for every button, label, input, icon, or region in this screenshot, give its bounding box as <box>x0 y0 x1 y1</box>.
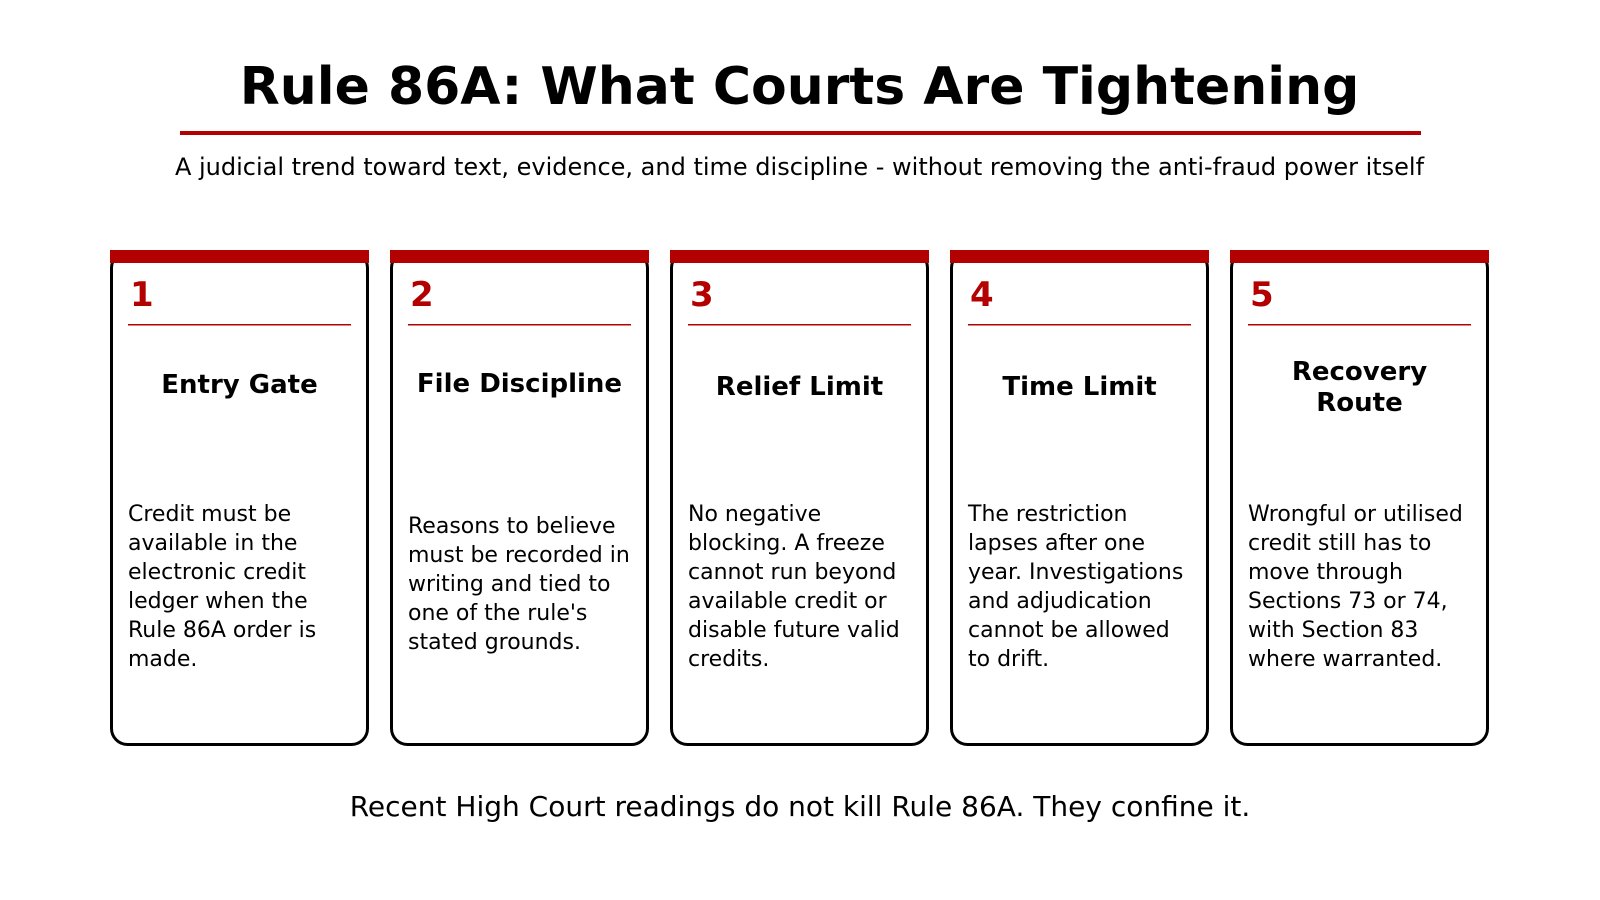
number 5: 5 <box>1250 275 1274 315</box>
body text: Recovery Route: move through <box>1248 560 1403 585</box>
body text: Time Limit: cannot be allowed <box>968 618 1170 643</box>
body text: Entry Gate: electronic credit <box>128 560 306 585</box>
panel: card 3 Relief Limit <box>670 250 929 744</box>
body text: Entry Gate: available in the <box>128 531 297 556</box>
panel: card 1 Entry Gate <box>110 250 369 744</box>
body text: Recovery Route: credit still has to <box>1248 531 1431 556</box>
body text: Time Limit: and adjudication <box>968 589 1152 614</box>
body text: Relief Limit: blocking. A freeze <box>688 531 885 556</box>
body text: Time Limit: year. Investigations <box>968 560 1183 585</box>
body text: File Discipline: Reasons to believe <box>408 514 616 539</box>
body text: Relief Limit: disable future valid <box>688 618 900 643</box>
body text: Entry Gate: Rule 86A order is <box>128 618 316 643</box>
subtitle: A judicial trend toward text, evidence, and time discipline - without removing the anti-fraud power itself <box>175 153 1425 181</box>
title: Rule 86A: What Courts Are Tightening <box>240 57 1359 117</box>
heading: File Discipline: File Discipline <box>417 369 622 399</box>
heading: Entry Gate: Entry Gate <box>161 370 318 400</box>
number 2: 2 <box>410 275 434 315</box>
body text: File Discipline: stated grounds. <box>408 630 581 655</box>
body text: Recovery Route: with Section 83 <box>1248 618 1418 643</box>
body text: Entry Gate: made. <box>128 647 197 672</box>
body text: File Discipline: writing and tied to <box>408 572 610 597</box>
heading: Time Limit: Time Limit <box>1002 372 1157 402</box>
footer takeaway: Recent High Court readings do not kill Rule 86A. They confine it. <box>350 790 1250 823</box>
number 1: 1 <box>130 275 154 315</box>
body text: Relief Limit: available credit or <box>688 589 888 614</box>
number 3: 3 <box>690 275 714 315</box>
body text: Time Limit: to drift. <box>968 647 1049 672</box>
panel: card 4 Time Limit <box>950 250 1209 744</box>
body text: Recovery Route: where warranted. <box>1248 647 1442 672</box>
panel: card 5 Recovery Route <box>1230 250 1489 744</box>
body text: Relief Limit: cannot run beyond <box>688 560 896 585</box>
body text: Recovery Route: Sections 73 or 74, <box>1248 589 1448 614</box>
heading: Recovery Route: Recovery <box>1292 357 1427 387</box>
body text: File Discipline: one of the rule's <box>408 601 587 626</box>
body text: Entry Gate: Credit must be <box>128 502 291 527</box>
body text: File Discipline: must be recorded in <box>408 543 630 568</box>
body text: Entry Gate: ledger when the <box>128 589 308 614</box>
heading: Relief Limit: Relief Limit <box>716 372 883 402</box>
body text: Time Limit: lapses after one <box>968 531 1145 556</box>
body text: Relief Limit: No negative <box>688 502 821 527</box>
title underline <box>180 131 1421 135</box>
body text: Relief Limit: credits. <box>688 647 769 672</box>
heading: Recovery Route: Route <box>1316 388 1403 418</box>
body text: Recovery Route: Wrongful or utilised <box>1248 502 1463 527</box>
panel: card 2 File Discipline <box>390 250 649 744</box>
number 4: 4 <box>970 275 994 315</box>
body text: Time Limit: The restriction <box>967 502 1128 527</box>
